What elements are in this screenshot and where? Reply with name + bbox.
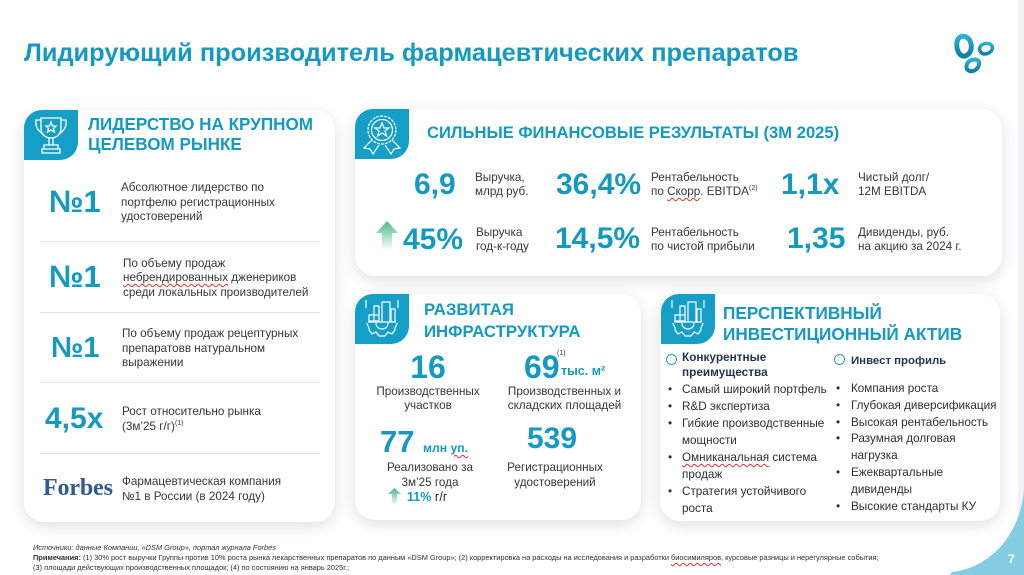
heading	[88, 115, 313, 154]
subheading: преимущества	[682, 365, 768, 379]
list: •	[836, 399, 840, 412]
metric: No1 prescription	[51, 327, 298, 369]
metric: Forbes	[43, 475, 281, 502]
description: 3м’25 года	[402, 476, 458, 488]
unit: млн уп.	[423, 441, 468, 455]
metric: revenue	[414, 168, 528, 201]
metric: net margin: 14,5%	[555, 222, 640, 255]
heading: ИНФРАСТРУКТУРА	[424, 322, 580, 341]
description	[651, 171, 758, 202]
panel: financial results	[355, 109, 1002, 276]
icon: trophy	[24, 110, 78, 160]
metric: sites: 16	[410, 349, 446, 385]
list text	[682, 381, 827, 517]
list	[830, 381, 998, 517]
list text: дивиденды	[851, 483, 912, 496]
description: По объему продаж	[123, 256, 225, 270]
description	[122, 405, 261, 432]
description: Чистый долг/	[858, 171, 929, 184]
column: investment profile	[830, 350, 998, 516]
metric: sites	[376, 349, 480, 412]
description: 12М EBITDA	[858, 185, 926, 198]
list: •	[668, 451, 672, 464]
page number: 7	[1008, 552, 1015, 566]
list text: Разумная долговая	[851, 432, 956, 445]
panel: investment asset	[660, 294, 1000, 521]
column: competitive advantages	[666, 350, 827, 515]
description: Рентабельность	[651, 226, 739, 239]
description: по Скорр. EBITDA(2)	[651, 185, 758, 198]
description	[123, 256, 308, 298]
list: •	[668, 417, 672, 430]
description: Регистрационных	[507, 461, 603, 474]
description	[858, 226, 962, 253]
description	[387, 461, 473, 488]
description: Производственных и	[508, 385, 621, 398]
list: •	[836, 432, 840, 445]
description: Реализовано за	[387, 461, 473, 474]
description: (3м’25 г/г)(1)	[122, 420, 184, 432]
panel: leadership	[24, 110, 335, 522]
metric: dividends	[787, 222, 962, 255]
description: среди локальных производителей	[123, 286, 308, 298]
list: •	[836, 466, 840, 479]
description: по чистой прибыли	[651, 240, 755, 253]
description: препаратовв натуральном	[122, 342, 265, 354]
heading	[723, 303, 962, 344]
list text: роста	[682, 502, 713, 515]
description: удостоверений	[514, 476, 596, 488]
list: •	[668, 383, 672, 396]
description	[507, 461, 603, 488]
heading: ЦЕЛЕВОМ РЫНКЕ	[88, 135, 242, 154]
heading: ПЕРСПЕКТИВНЫЙ	[723, 303, 882, 323]
description: складских площадей	[508, 399, 621, 412]
description: Выручка,	[475, 171, 525, 184]
list: •	[836, 500, 840, 513]
description	[122, 475, 281, 502]
heading: ИНВЕСТИЦИОННЫЙ АКТИВ	[723, 324, 962, 344]
description	[651, 226, 755, 253]
metric: net debt	[781, 168, 930, 201]
metric: certificates: 539	[527, 422, 577, 455]
description: год-к-году	[476, 240, 529, 253]
description: участков	[404, 399, 452, 412]
subheading	[682, 350, 768, 380]
description: Выручка	[476, 226, 522, 239]
description: Фармацевтическая компания	[122, 475, 281, 488]
list: •	[668, 400, 672, 413]
description	[508, 385, 621, 412]
heading	[424, 300, 580, 341]
description: выражении	[122, 356, 183, 369]
metric: area: 69	[524, 349, 560, 385]
list: •	[668, 485, 672, 498]
footnotes	[33, 543, 933, 573]
metric: Adjusted EBITDA margin	[556, 168, 758, 202]
metric: Adjusted EBITDA margin: 36,4%	[556, 168, 641, 201]
list: •	[836, 382, 840, 395]
metric: dividends: 1,35	[787, 222, 845, 255]
corner accent with page number	[950, 490, 1024, 575]
list text: Стратегия устойчивого	[682, 485, 806, 498]
icon: factory gear	[661, 294, 715, 344]
metric: Forbes: Forbes	[43, 475, 113, 501]
footnotes: (3) площади действующих производственных площадок; (4) по состоянию на январь 2025г.;	[33, 563, 349, 572]
metric: area	[508, 349, 621, 412]
unit: тыс. м²	[561, 364, 605, 378]
metric: net debt: 1,1x	[781, 168, 839, 201]
description: удостоверений	[121, 210, 202, 223]
footnotes: Примечания: (1) 30% рост выручки Группы против 10% роста рынка лекарственных препаратов по данным «DSM Group»; (2) корректировка на расходы на исследования и разработки биосимиляров, курсовые разницы и нерегулярные события;	[33, 553, 879, 562]
list text: Высокие стандарты КУ	[851, 500, 976, 513]
list: •	[836, 416, 840, 429]
footnotes: Источники: данные Компании, «DSM Group», портал журнала Forbes	[33, 543, 276, 552]
decorative right strip	[1018, 0, 1024, 530]
heading: РАЗВИТАЯ	[424, 300, 514, 319]
metric: No1 prescription: №1	[51, 332, 99, 364]
metric: No1 generics: №1	[49, 259, 101, 294]
description: Рост относительно рынка	[122, 405, 261, 418]
metric: packs sold: 77	[380, 424, 414, 459]
panel: infrastructure	[355, 294, 641, 520]
description: Дивиденды, руб.	[858, 226, 949, 239]
icon: factory gear	[355, 294, 409, 344]
list text: Ежеквартальные	[851, 466, 943, 479]
description: По объему продаж рецептурных	[122, 327, 298, 340]
bullet ring	[666, 354, 677, 364]
title: Лидирующий производитель фармацевтических препаратов	[24, 39, 798, 67]
list text: Самый широкий портфель	[682, 383, 827, 396]
description: №1 в России (в 2024 году)	[122, 490, 265, 502]
subheading: Конкурентные	[682, 350, 766, 364]
list text: Омниканальная система	[682, 451, 817, 464]
icon: small arrow	[388, 488, 401, 504]
description: Производственных	[376, 385, 480, 398]
list text: Гибкие производственные	[682, 417, 824, 430]
footnote mark: (1)	[557, 350, 566, 357]
list text: мощности	[682, 434, 737, 447]
description	[376, 385, 480, 412]
description	[476, 226, 529, 253]
metric: net margin	[555, 222, 755, 255]
icon: medal	[355, 109, 409, 159]
heading: ЛИДЕРСТВО НА КРУПНОМ	[88, 115, 313, 134]
subheading: Инвест профиль	[851, 355, 946, 367]
list text	[851, 381, 996, 515]
bullet ring	[834, 354, 844, 364]
description	[475, 171, 528, 198]
list text: Глубокая диверсификация	[851, 399, 996, 412]
description	[858, 171, 930, 198]
description: на акцию за 2024 г.	[858, 240, 962, 253]
metric: packs sold	[380, 424, 473, 504]
metric: revenue growth	[403, 223, 529, 256]
metric: market growth	[45, 402, 261, 435]
growth: 11% г/г	[407, 490, 447, 504]
description: портфелю регистрационных	[121, 196, 275, 208]
icon: company logo	[954, 34, 994, 74]
description	[121, 181, 275, 223]
description: млрд руб.	[475, 185, 528, 198]
list text: продаж	[682, 468, 722, 481]
list text: R&D экспертиза	[682, 400, 770, 413]
metric: No1 portfolio: №1	[49, 184, 101, 219]
metric: No1 generics	[49, 256, 308, 298]
description: Абсолютное лидерство по	[121, 181, 264, 194]
metric: certificates	[507, 422, 603, 488]
metric: revenue growth: 45%	[403, 223, 463, 256]
list text: нагрузка	[851, 449, 898, 462]
list text: Компания роста	[851, 382, 938, 395]
metric: revenue: 6,9	[414, 168, 456, 201]
list text: Высокая рентабельность	[851, 416, 988, 429]
description: небрендированных дженериков	[123, 271, 296, 284]
list	[664, 381, 834, 517]
metric: No1 portfolio	[49, 181, 275, 223]
icon: green up arrow	[376, 221, 398, 248]
heading: СИЛЬНЫЕ ФИНАНСОВЫЕ РЕЗУЛЬТАТЫ (3М 2025)	[427, 123, 839, 142]
description: Рентабельность	[651, 171, 739, 184]
metric: market growth: 4,5x	[45, 402, 103, 435]
description	[122, 327, 298, 369]
